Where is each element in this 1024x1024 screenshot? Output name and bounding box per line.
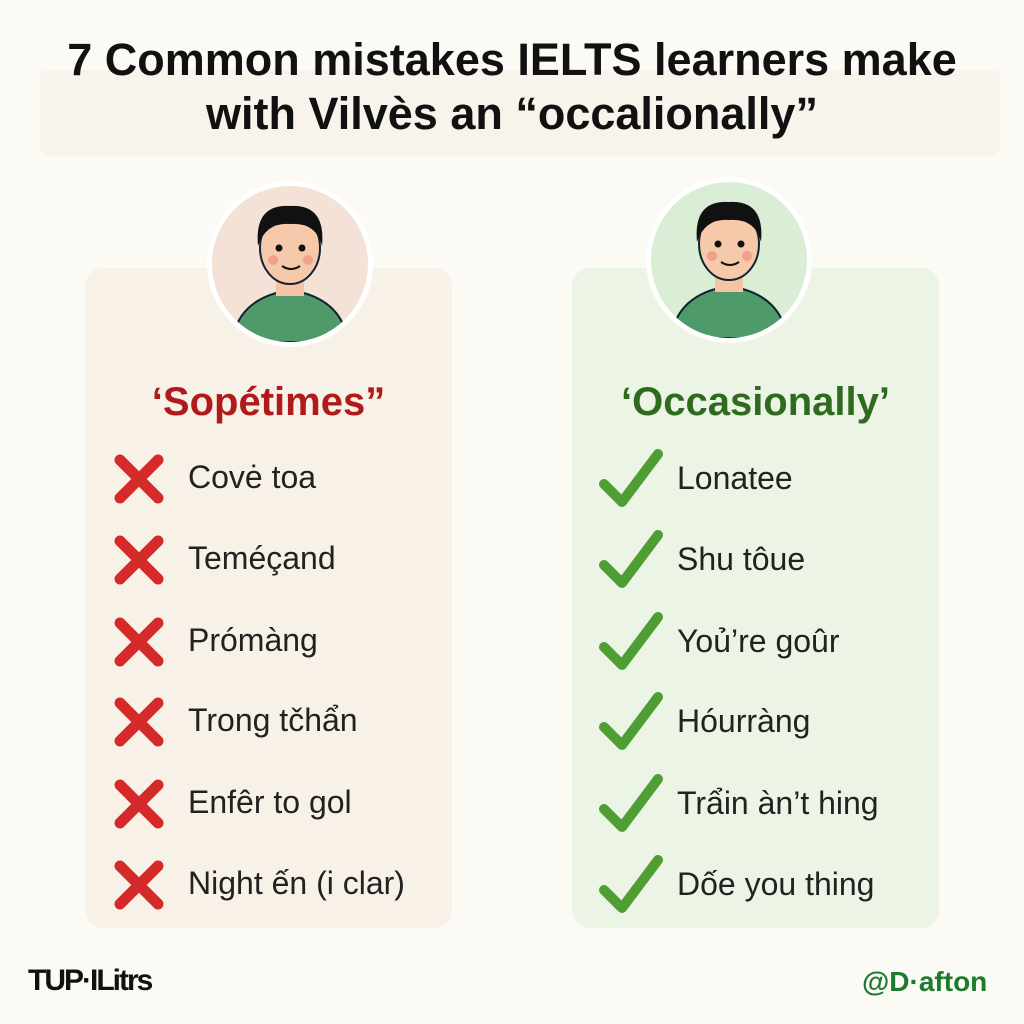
- title: [67, 34, 957, 139]
- avatar left: [207, 181, 373, 347]
- list: mistakes: Night ến (i clar): [188, 865, 405, 901]
- list: correct: Hóurràng: [677, 703, 810, 739]
- title: with Vilvès an “occalionally”: [206, 88, 818, 139]
- decorative background top: [40, 70, 1000, 155]
- heading left: ‘Sopétimes”: [152, 380, 385, 424]
- list: mistakes: [114, 454, 405, 910]
- panel: occasionally: [572, 268, 939, 928]
- list: correct: Shu tôue: [677, 541, 805, 577]
- avatar right: [646, 177, 812, 343]
- list: mistakes: Teméçand: [188, 540, 336, 576]
- panel: sometimes: [85, 268, 452, 928]
- list: mistakes: Enfêr to gol: [188, 784, 352, 820]
- handle: @D·afton: [862, 966, 987, 997]
- list: mistakes: Covė toa: [188, 459, 316, 495]
- title: 7 Common mistakes IELTS learners make: [67, 34, 957, 85]
- logo: TUP·ILitrs: [28, 964, 151, 997]
- list: correct: Yoủ’re goûr: [677, 623, 840, 659]
- heading right: ‘Occasionally’: [621, 380, 890, 424]
- list: mistakes: Trong tčhẩn: [188, 702, 358, 738]
- list: correct: Lonatee: [677, 460, 793, 496]
- list: correct: [599, 449, 879, 913]
- list: correct: Dốe you thing: [677, 866, 874, 902]
- list: mistakes: Prómàng: [188, 622, 318, 658]
- list: correct: Trẩin àn’t hing: [677, 785, 879, 821]
